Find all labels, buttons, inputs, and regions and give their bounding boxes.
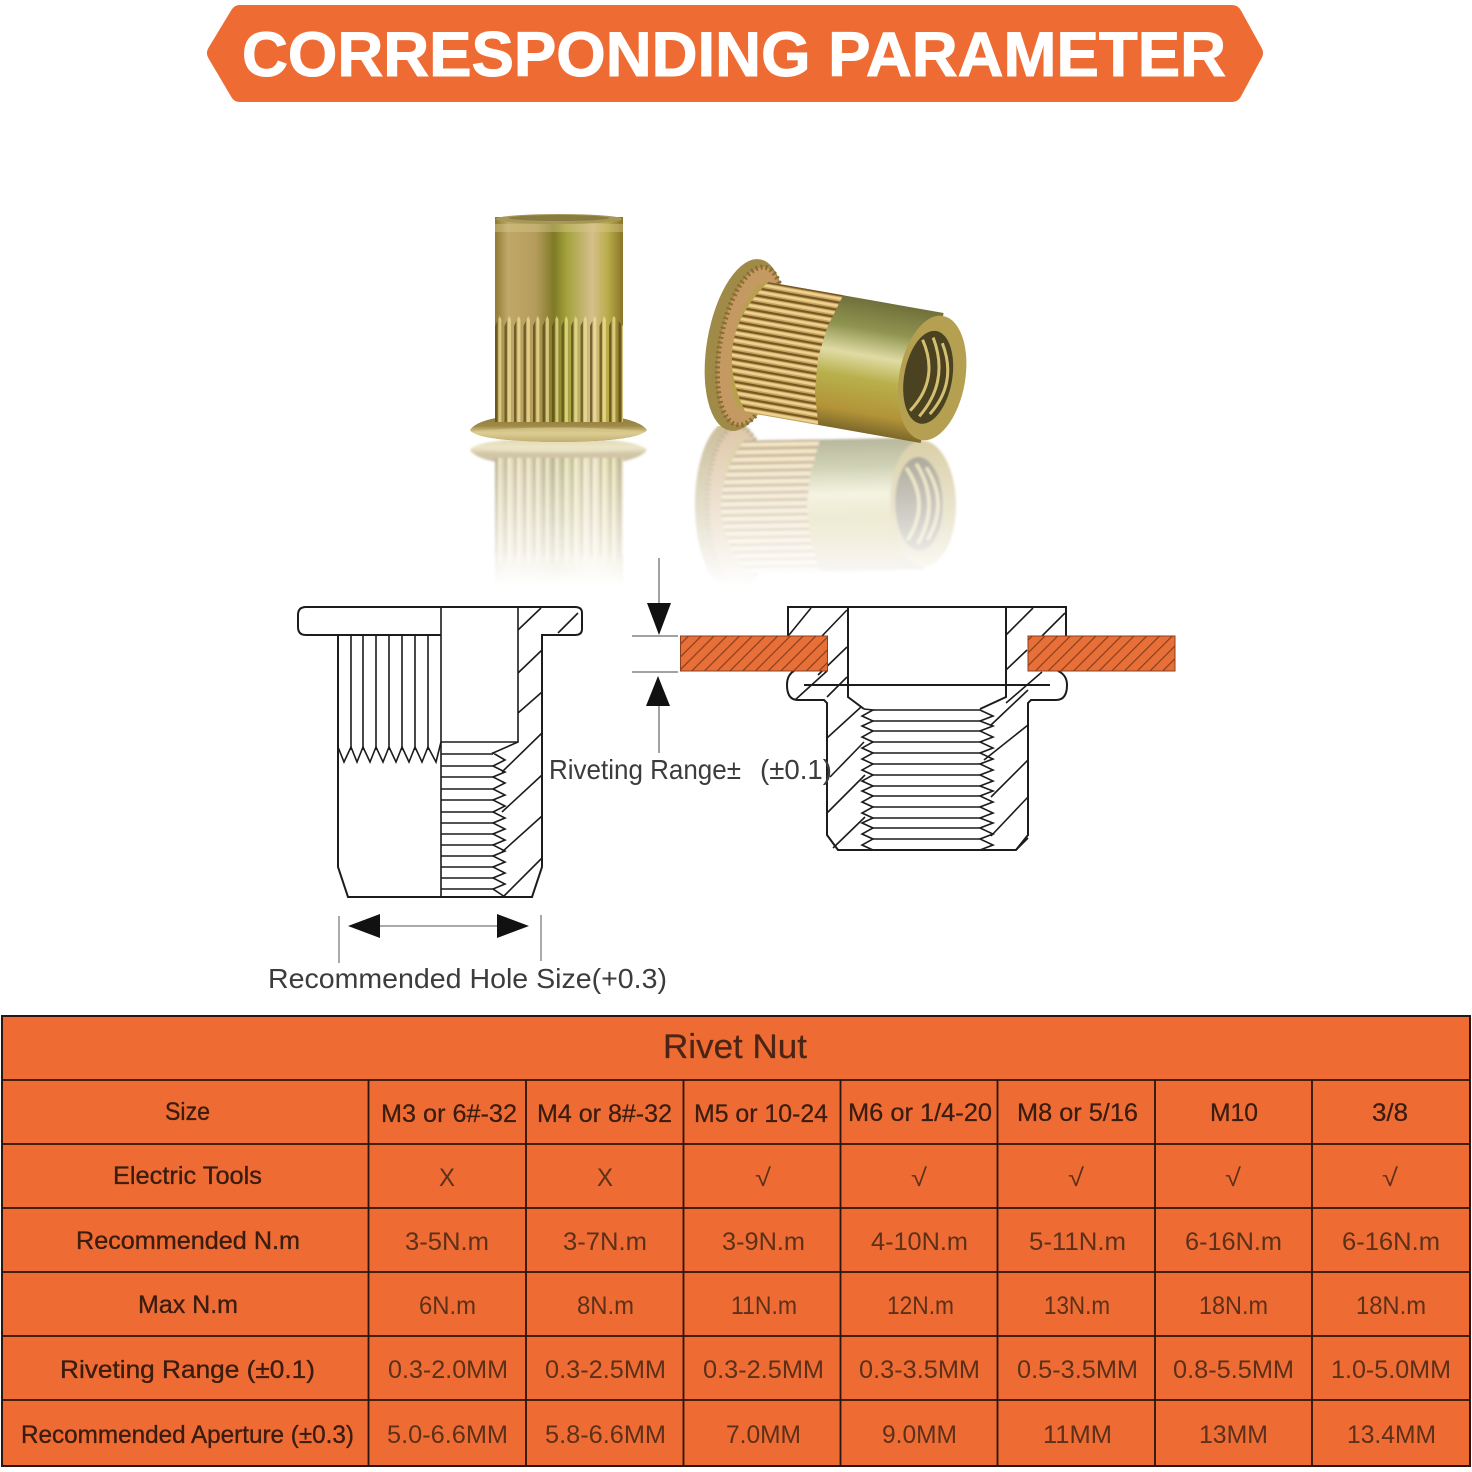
row: electric tools: √ [755,1164,771,1192]
row: recommended torque: Recommended N.m [76,1227,300,1255]
row: recommended aperture: 7.0MM [726,1421,801,1449]
row: recommended torque [76,1227,1440,1256]
row: recommended aperture [21,1421,1436,1449]
row: recommended aperture: 5.0-6.6MM [387,1421,508,1449]
product photo: upright rivet nut [470,214,648,576]
row: electric tools: √ [911,1164,927,1192]
riveting range dimension arrows [632,558,678,753]
row: riveting range: 0.8-5.5MM [1173,1356,1294,1384]
row: size: M3 or 6#-32 [381,1100,517,1128]
row: recommended torque: 5-11N.m [1029,1228,1126,1256]
row: size [165,1098,1408,1128]
row: riveting range: 0.3-3.5MM [859,1356,980,1384]
row: max torque: 12N.m [887,1292,954,1320]
parameter table [2,1016,1470,1466]
row: riveting range: Riveting Range (±0.1) [60,1356,315,1384]
row: riveting range [60,1356,1451,1384]
row: max torque: 18N.m [1356,1292,1426,1320]
row: recommended torque: 6-16N.m [1342,1228,1440,1256]
row: electric tools: X [597,1164,613,1192]
row: size: Size [165,1098,210,1126]
row: size: M8 or 5/16 [1017,1099,1138,1127]
row: recommended torque: 3-9N.m [722,1228,805,1256]
row: riveting range: 1.0-5.0MM [1331,1356,1451,1384]
riveting range label: Riveting Range± [549,754,741,785]
plate sections [680,636,1175,671]
row: electric tools: √ [1225,1164,1241,1192]
product photo: tilted rivet nut [694,259,966,574]
row: max torque: 13N.m [1044,1292,1110,1320]
row: size: M5 or 10-24 [694,1100,828,1128]
row: recommended aperture: Recommended Aperture (±0.3) [21,1421,354,1449]
row: max torque: Max N.m [138,1291,238,1319]
row: size: M4 or 8#-32 [537,1100,672,1128]
row: recommended aperture: 11MM [1043,1421,1112,1449]
row: electric tools: √ [1068,1164,1084,1192]
hole size dimension arrows [339,914,541,963]
row: riveting range: 0.3-2.5MM [545,1356,666,1384]
row: recommended aperture: 9.0MM [882,1421,957,1449]
row: recommended aperture: 5.8-6.6MM [545,1421,666,1449]
row: electric tools: X [439,1164,455,1192]
row: electric tools: Electric Tools [113,1162,262,1190]
row: recommended torque: 4-10N.m [871,1228,968,1256]
riveting range label: (±0.1) [760,754,832,785]
row: size: M6 or 1/4-20 [848,1099,992,1127]
row: max torque: 11N.m [731,1292,797,1320]
row: max torque: 8N.m [577,1292,634,1320]
row: riveting range: 0.3-2.5MM [703,1356,824,1384]
diagram: installed rivet nut in plate [680,607,1175,850]
row: recommended aperture: 13.4MM [1347,1421,1436,1449]
row: size: M10 [1210,1099,1258,1127]
hole size label: Recommended Hole Size(+0.3) [268,963,667,994]
row: recommended aperture: 13MM [1199,1421,1268,1449]
row: recommended torque: 3-5N.m [405,1228,489,1256]
row: recommended torque: 3-7N.m [563,1228,647,1256]
row: riveting range: 0.5-3.5MM [1017,1356,1138,1384]
row: max torque: 18N.m [1199,1292,1268,1320]
row: electric tools [113,1162,1398,1192]
diagram: rivet nut side section [298,607,582,897]
row: recommended torque: 6-16N.m [1185,1228,1282,1256]
row: max torque [138,1291,1426,1320]
table title: Rivet Nut [663,1028,808,1066]
row: size: 3/8 [1372,1099,1408,1127]
row: max torque: 6N.m [419,1292,476,1320]
title banner: CORRESPONDING PARAMETER [242,20,1226,90]
row: electric tools: √ [1382,1164,1398,1192]
row: riveting range: 0.3-2.0MM [388,1356,508,1384]
